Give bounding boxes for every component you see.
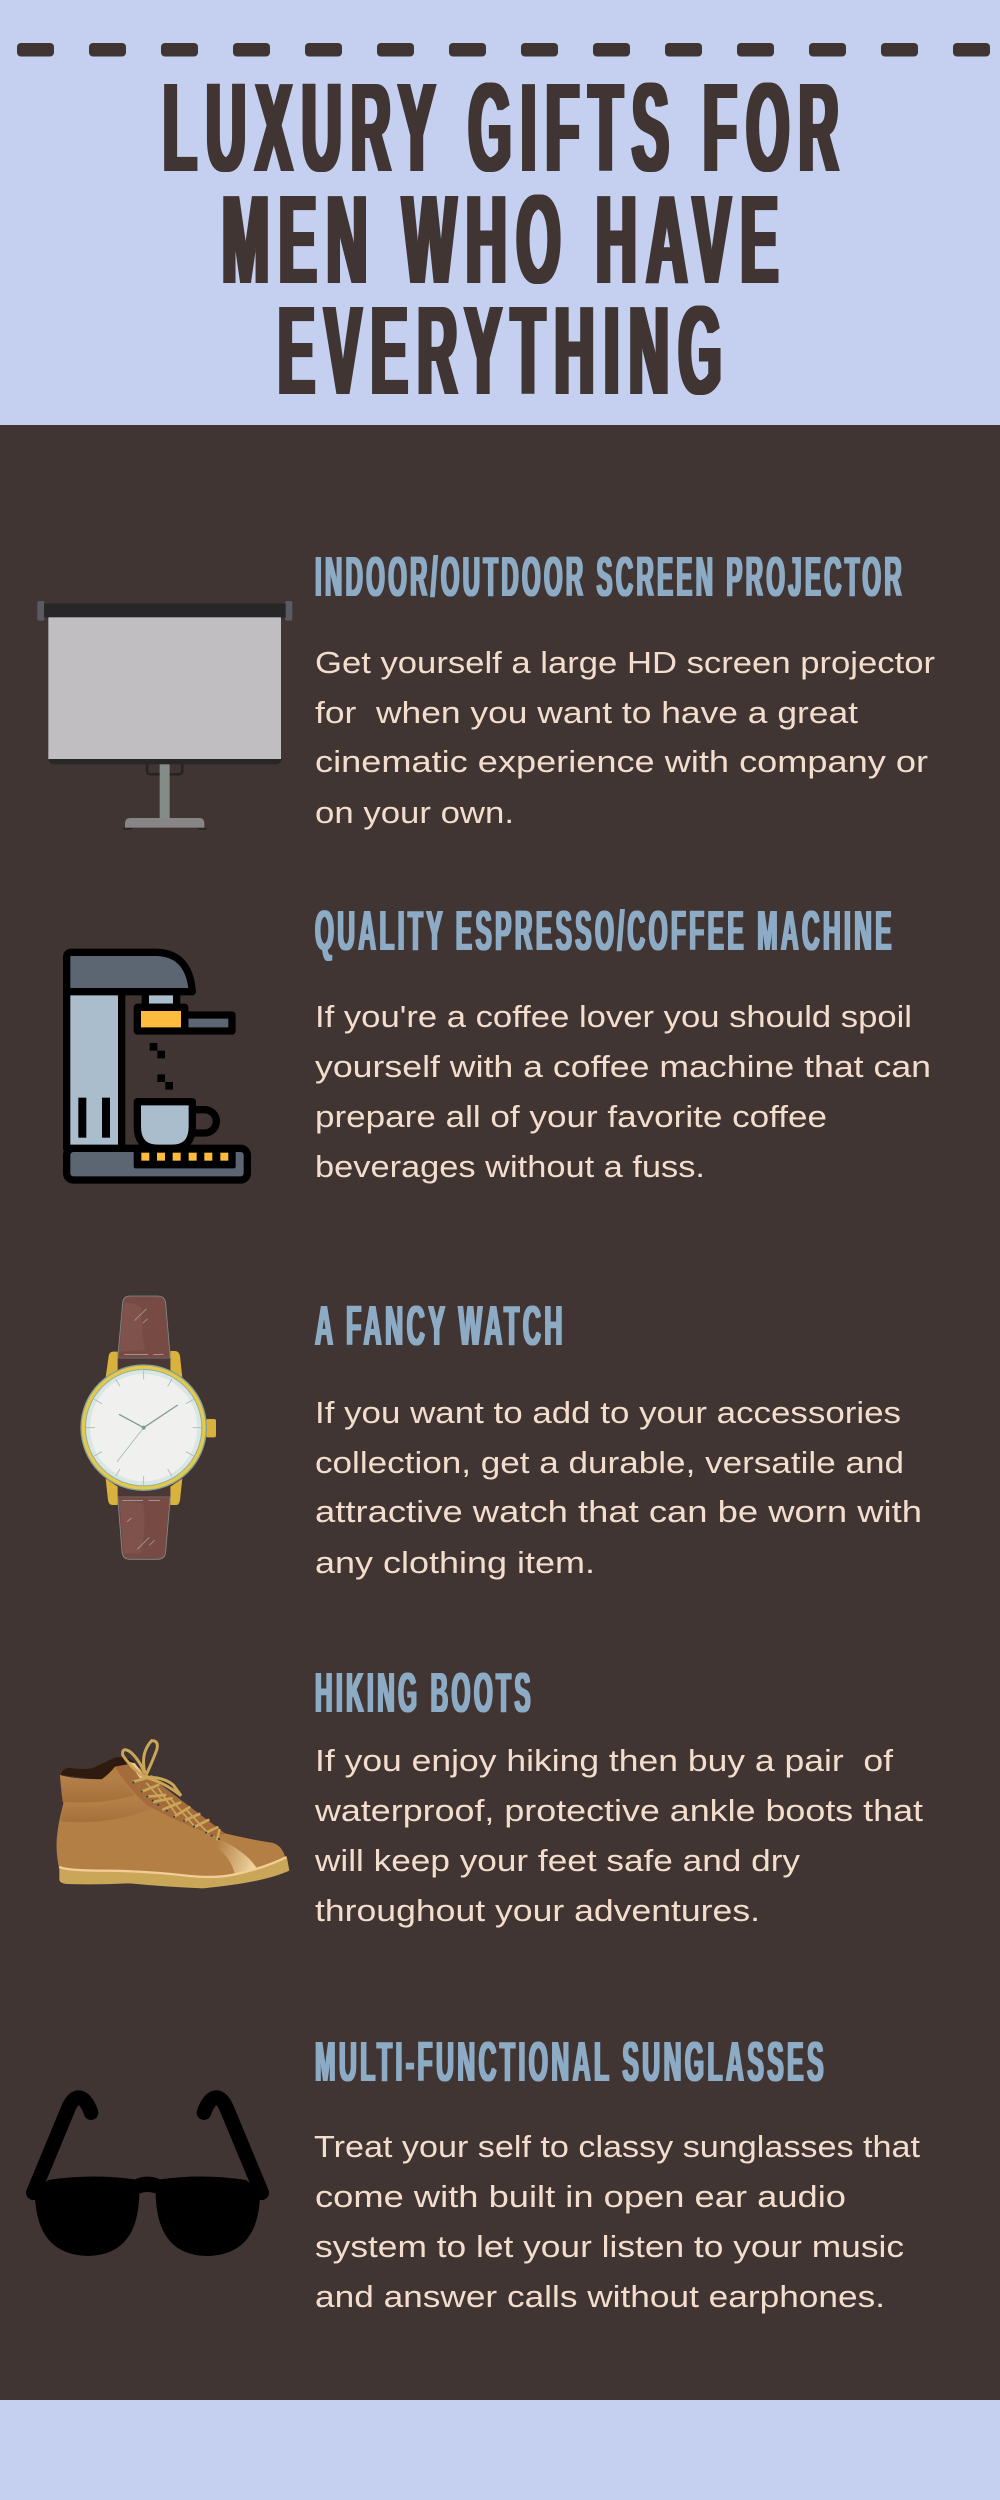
text: boots: will keep your feet safe and dry [314,1843,801,1878]
icon: coffee machine [67,952,247,1180]
title [163,56,848,421]
panel: coffee machine [67,900,931,1184]
text: coffee machine: beverages without a fuss. [315,1149,705,1184]
text: sunglasses: Treat your self to classy sunglasses that [314,2129,920,2164]
icon: projector screen [37,601,292,830]
header band [0,0,1000,425]
footer band [0,2400,1000,2500]
text: sunglasses [314,2129,920,2314]
text: projector: Get yourself a large HD screen projector [315,645,935,680]
panel: screen projector [37,546,935,830]
panel: sunglasses [33,2031,920,2314]
text: coffee machine: If you're a coffee lover you should spoil [315,999,912,1034]
text: coffee machine: yourself with a coffee machine that can [315,1049,931,1084]
text: sunglasses: and answer calls without earphones. [315,2279,885,2314]
text: projector: on your own. [315,795,514,830]
dashed line [17,43,990,56]
text: projector: for when you want to have a great [315,695,858,730]
text: watch: attractive watch that can be worn with [315,1494,922,1529]
text: boots: waterproof, protective ankle boots that [314,1793,923,1828]
text: watch [315,1395,922,1580]
text: sunglasses: system to let your listen to your music [315,2229,904,2264]
text: coffee machine: prepare all of your favorite coffee [315,1099,827,1134]
text: coffee machine [315,999,931,1184]
icon: watch [80,1296,216,1559]
icon: hiking boot [57,1741,289,1888]
text: boots [314,1743,923,1928]
panel: hiking boots: HIKING BOOTS [315,1662,534,1725]
text: boots: If you enjoy hiking then buy a pair of [315,1743,893,1778]
text: projector: cinematic experience with company or [315,744,928,779]
text: watch: collection, get a durable, versatile and [315,1445,904,1480]
text: watch: any clothing item. [315,1545,595,1580]
icon: sunglasses [33,2098,262,2256]
text: watch: If you want to add to your accessories [315,1395,901,1430]
panel: watch [80,1295,922,1580]
text: boots: throughout your adventures. [315,1893,760,1928]
panel: watch: A FANCY WATCH [315,1295,566,1358]
text: sunglasses: come with built in open ear audio [315,2179,846,2214]
text: projector [315,645,935,830]
panel: hiking boots [57,1662,923,1928]
dark background panel [0,425,1000,2400]
